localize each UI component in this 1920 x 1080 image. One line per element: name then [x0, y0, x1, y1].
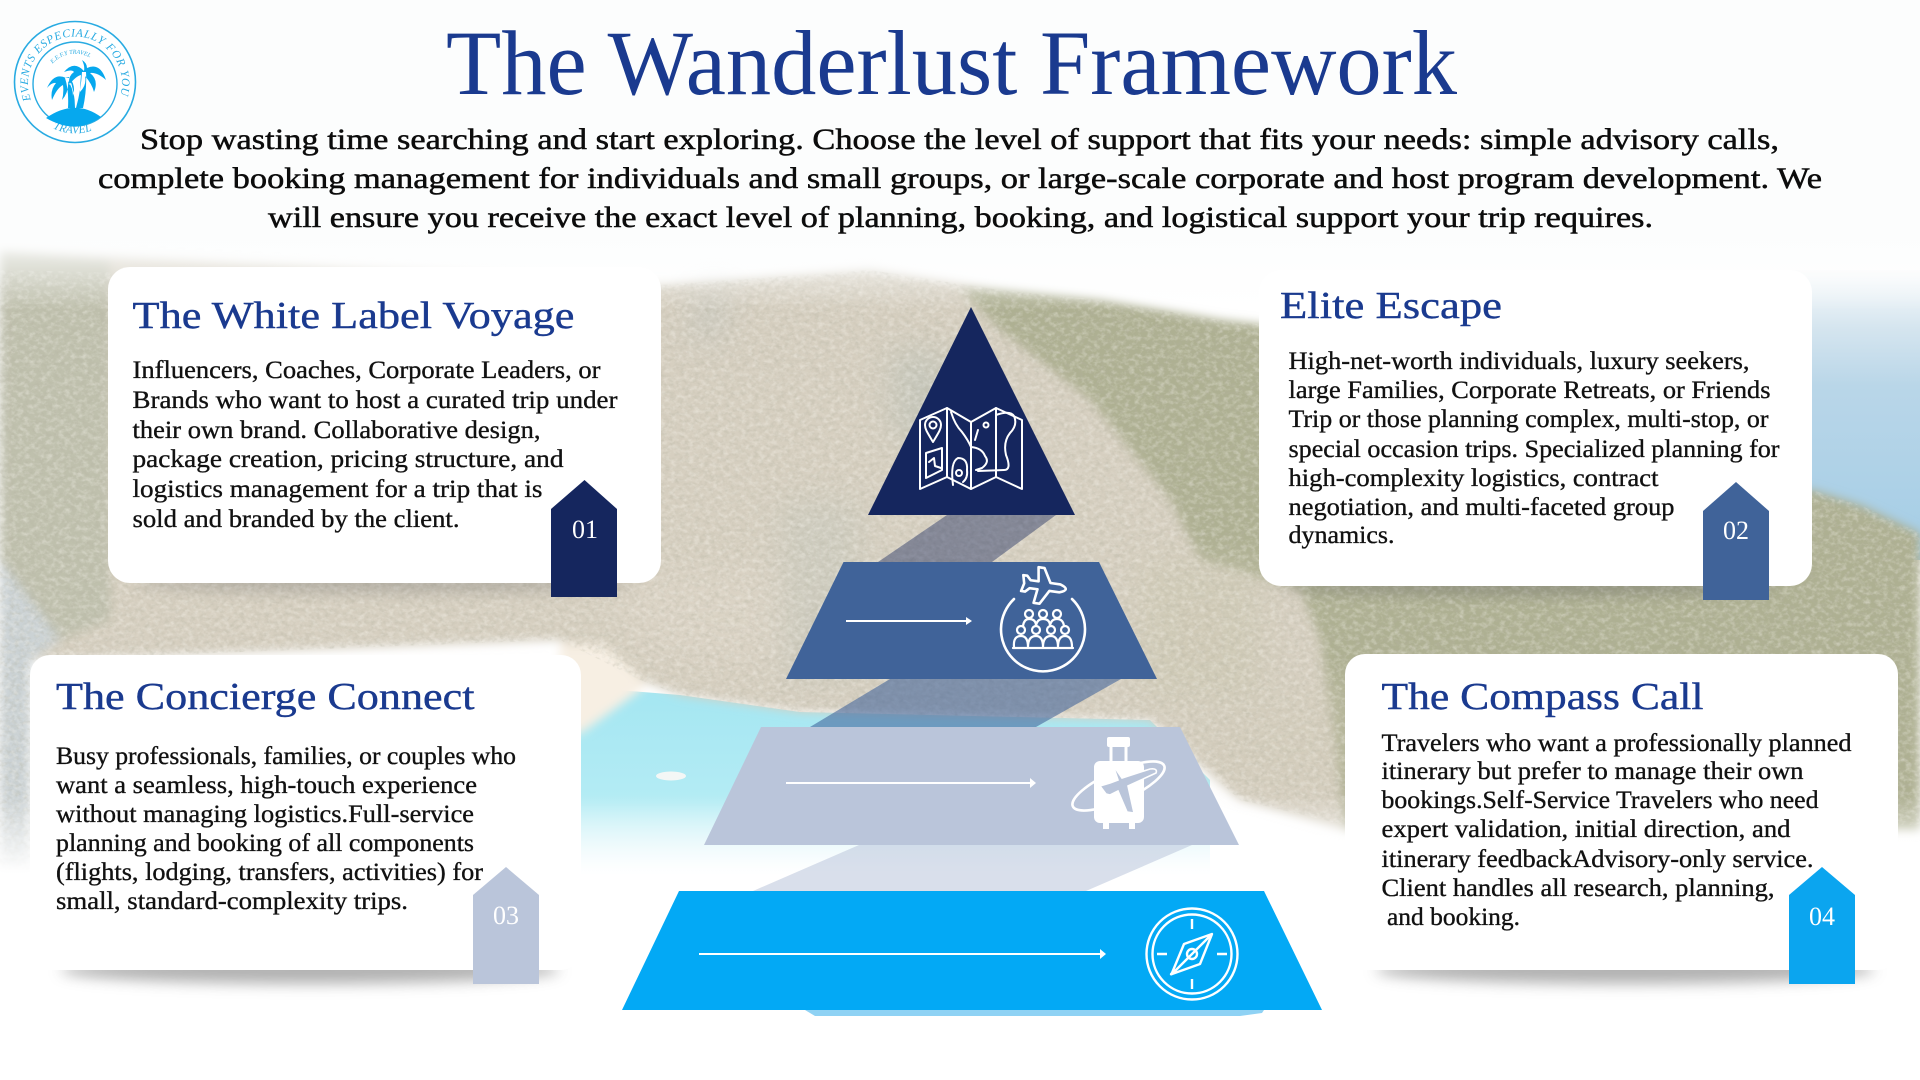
arrow: level 4 — [699, 949, 1106, 959]
background: coastal cliff scene — [0, 248, 1920, 862]
tag 03: 03 — [493, 901, 519, 930]
logo bottom text: TRAVEL — [54, 122, 92, 134]
body: The Compass Call — [1382, 730, 1852, 931]
tag 04 — [1789, 867, 1855, 984]
body: The Compass Call: itinerary but prefer to manage their own — [1382, 758, 1804, 785]
tag 01 — [551, 480, 617, 597]
icon: group travel — [1001, 565, 1085, 671]
connector: level 1 to 2 — [878, 515, 1056, 562]
icon: compass — [1146, 908, 1238, 1000]
body: The Compass Call: Travelers who want a professionally planned — [1382, 730, 1852, 757]
body: The Compass Call: expert validation, initial direction, and — [1382, 816, 1791, 843]
body: Elite Escape: High-net-worth individuals, luxury seekers, — [1288, 348, 1750, 375]
connector: level 3 to 4 — [753, 845, 1192, 891]
tag 02 — [1703, 482, 1769, 600]
body: The White Label Voyage: package creation, pricing structure, and — [132, 446, 564, 473]
level 4: trapezoid — [622, 891, 1322, 1010]
body: The Compass Call: and booking. — [1387, 904, 1520, 931]
body: The Compass Call: bookings.Self-Service Travelers who need — [1382, 787, 1819, 814]
intro paragraph — [98, 123, 1822, 234]
level 3: trapezoid — [704, 727, 1239, 845]
body: The Concierge Connect: Busy professionals, families, or couples who — [56, 743, 516, 770]
arrow: level 2 — [846, 617, 972, 625]
heading: The Compass Call: The Compass Call — [1382, 676, 1704, 718]
body: The White Label Voyage: their own brand. Collaborative design, — [132, 417, 540, 444]
panel: The Concierge Connect — [30, 655, 581, 984]
logo inner text: E.E.F.Y TRAVEL — [50, 50, 91, 64]
body: Elite Escape — [1288, 348, 1780, 549]
panel: The White Label Voyage — [108, 267, 661, 597]
body: The Concierge Connect: planning and booking of all components — [56, 830, 474, 857]
body: Elite Escape: Trip or those planning complex, multi-stop, or — [1288, 406, 1769, 433]
icon: suitcase with plane — [1067, 737, 1170, 829]
connector: level 2 to 3 — [810, 679, 1121, 727]
logo — [14, 20, 136, 144]
level 2: trapezoid — [786, 562, 1157, 679]
body: The Concierge Connect — [56, 743, 516, 915]
body: Elite Escape: large Families, Corporate Retreats, or Friends — [1288, 377, 1770, 404]
body: The White Label Voyage: Influencers, Coaches, Corporate Leaders, or — [132, 357, 601, 384]
body: Elite Escape: high-complexity logistics, contract — [1288, 465, 1659, 492]
logo palm island — [46, 60, 106, 126]
body: The White Label Voyage: Brands who want to host a curated trip under — [132, 387, 618, 414]
body: The Concierge Connect: without managing logistics.Full-service — [56, 801, 474, 828]
heading: The Concierge Connect: The Concierge Connect — [56, 676, 475, 718]
body: The Compass Call: Client handles all research, planning, — [1382, 875, 1774, 902]
title: The Wanderlust Framework — [446, 12, 1457, 114]
body: Elite Escape: dynamics. — [1288, 522, 1394, 549]
level 1: triangle — [868, 307, 1075, 515]
arrow: level 3 — [786, 778, 1036, 788]
tag 03 — [473, 867, 539, 984]
icon: folded map — [920, 408, 1022, 489]
intro paragraph: will ensure you receive the exact level of planning, booking, and logistical support your trip requires. — [268, 201, 1653, 234]
body: The Concierge Connect: (flights, lodging, transfers, activities) for — [56, 859, 484, 886]
panel: Elite Escape — [1259, 270, 1812, 600]
tag 04: 04 — [1809, 902, 1835, 931]
body: The White Label Voyage: sold and branded by the client. — [132, 506, 460, 533]
body: Elite Escape: negotiation, and multi-faceted group — [1288, 494, 1674, 521]
tag 01: 01 — [572, 515, 598, 544]
body: The Concierge Connect: want a seamless, high-touch experience — [56, 772, 477, 799]
tag 02: 02 — [1723, 516, 1749, 545]
body: The Compass Call: itinerary feedbackAdvisory-only service. — [1382, 846, 1814, 873]
panel: The Compass Call — [1345, 654, 1898, 984]
pyramid — [622, 307, 1322, 1016]
heading: Elite Escape: Elite Escape — [1280, 285, 1502, 327]
heading: The White Label Voyage: The White Label Voyage — [132, 295, 574, 337]
body: Elite Escape: special occasion trips. Specialized planning for — [1288, 436, 1780, 463]
body: The White Label Voyage — [132, 357, 618, 533]
body: The White Label Voyage: logistics management for a trip that is — [132, 476, 542, 503]
intro paragraph: complete booking management for individuals and small groups, or large-scale corporate and host program development. We — [98, 162, 1822, 195]
intro paragraph: Stop wasting time searching and start exploring. Choose the level of support that fits your needs: simple advisory calls, — [140, 123, 1779, 156]
logo ring text: EVENTS ESPECIALLY FOR YOU — [20, 29, 130, 102]
connector: base edge — [805, 1010, 1264, 1016]
body: The Concierge Connect: small, standard-complexity trips. — [56, 888, 408, 915]
